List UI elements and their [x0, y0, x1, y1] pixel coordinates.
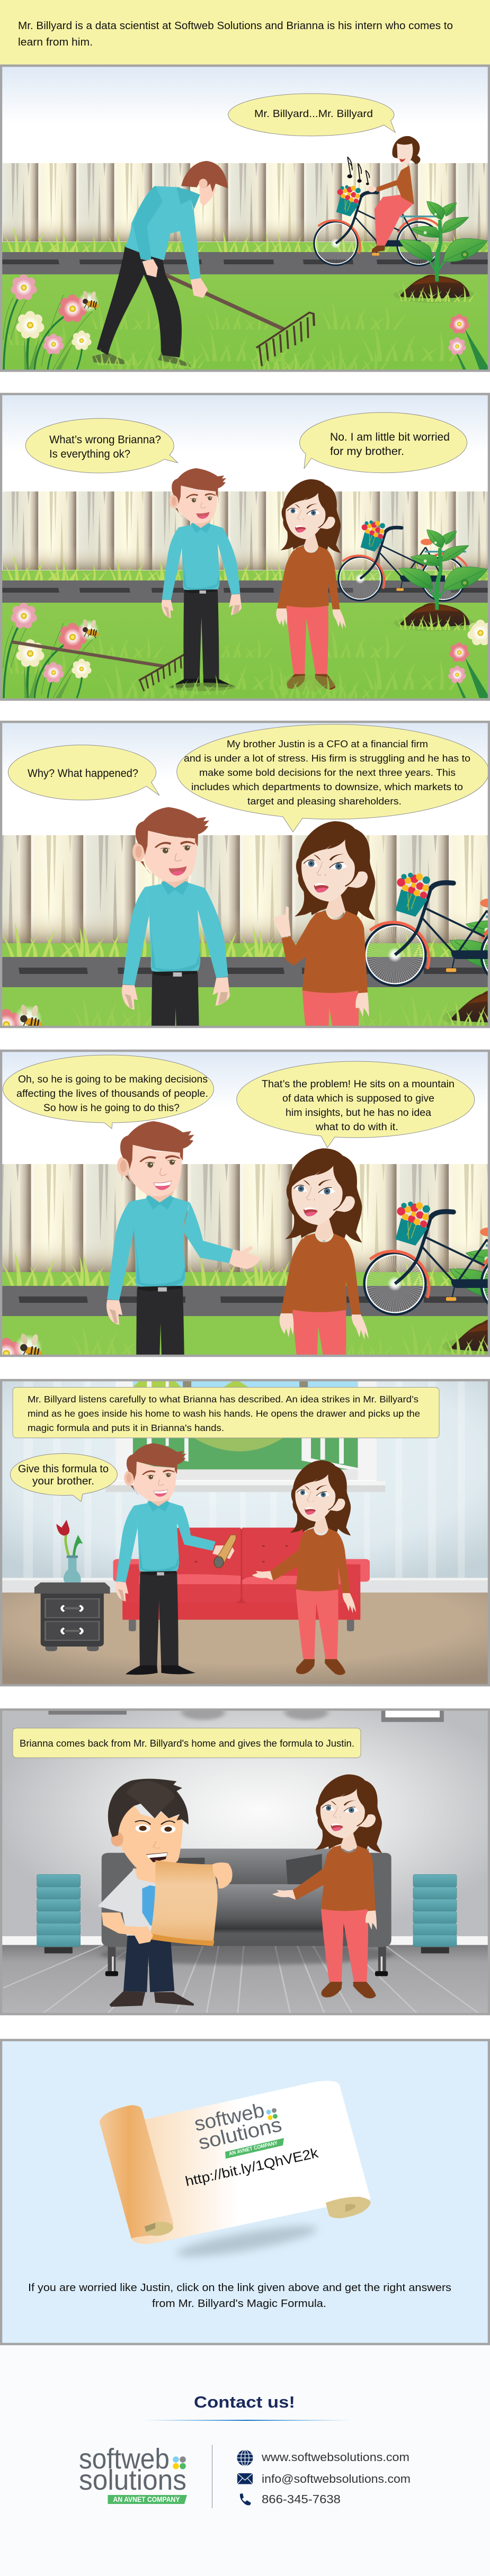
email: info@softwebsolutions.com — [262, 2472, 411, 2485]
rake — [165, 273, 315, 366]
narration caption: Brianna comes back from Mr. Billyard's home and gives the formula to Justin. — [20, 1738, 354, 1749]
music notes — [347, 157, 369, 185]
scroll illustration — [100, 2081, 371, 2244]
Mr. Billyard bending — [92, 161, 228, 367]
panel 4: How will he decide: That’s the problem! He sits on a mountain — [262, 1079, 455, 1090]
room background — [0, 1705, 490, 2015]
panel 3: What happened: My brother Justin is a CFO at a financial firm — [227, 739, 428, 749]
cream flower — [467, 620, 488, 645]
call to action text: from Mr. Billyard's Magic Formula. — [152, 2298, 326, 2310]
footer contact section — [0, 2345, 490, 2576]
panel frame — [1, 1051, 489, 1356]
panel frame — [1, 722, 489, 1027]
Justin with scroll — [98, 1779, 233, 2007]
speech bubble: Mr. Billyard — [10, 1454, 117, 1501]
speech bubble: Brianna — [300, 413, 467, 473]
panel 4: How will he decide: of data which is supposed to give — [282, 1093, 434, 1104]
panel 4: How will he decide: what to do with it. — [315, 1122, 398, 1133]
panel 5: living room, handing over the formula — [0, 1379, 490, 1687]
plant — [394, 530, 487, 631]
icon: globe — [237, 2450, 253, 2466]
Brianna — [276, 479, 346, 690]
bicycle and plant — [364, 873, 490, 1028]
panel 3: What happened: and is under a lot of stress. His firm is struggling and he has to — [184, 753, 470, 764]
panel 5: living room, handing over the formula: your brother. — [32, 1475, 94, 1487]
call to action text: If you are worried like Justin, click on the link given above and get the right answers — [28, 2282, 451, 2294]
panel 7: magic formula link — [1, 2040, 489, 2344]
panel frame — [1, 1710, 489, 2014]
panel 4: How will he decide — [0, 1050, 490, 1357]
link URL: http://bit.ly/1QhVE2k — [184, 2144, 320, 2189]
icon: phone — [240, 2493, 251, 2505]
Mr. Billyard gesturing — [106, 1121, 261, 1355]
Brianna on bicycle — [368, 136, 420, 253]
Softweb Solutions logo: solutions — [79, 2464, 186, 2496]
panel frame — [1, 66, 489, 371]
grass over feet — [92, 348, 308, 370]
bicycle — [338, 521, 467, 601]
room background — [0, 1379, 490, 1687]
narration caption — [13, 1728, 361, 1758]
panel 2: What's wrong: Is everything ok? — [49, 448, 130, 460]
close-up garden background — [0, 721, 490, 1042]
logo on scroll — [192, 2099, 284, 2159]
narration caption: magic formula and puts it in Brianna's hands. — [28, 1423, 224, 1433]
garden background — [0, 393, 490, 701]
intro caption: Mr. Billyard is a data scientist at Softweb Solutions and Brianna is his intern who comes to — [18, 20, 453, 32]
side table with vase — [34, 1520, 110, 1651]
website: www.softwebsolutions.com — [261, 2450, 409, 2464]
panel 2: What's wrong — [0, 393, 490, 701]
speech bubble: Mr. Billyard — [8, 745, 159, 800]
panel 3: What happened: Why? What happened? — [28, 767, 138, 780]
garden background — [0, 65, 490, 373]
speech bubble: Brianna — [237, 1061, 475, 1148]
panel 3: What happened: make some bold decisions for the next three years. This — [199, 767, 456, 778]
close-up garden background — [0, 1050, 490, 1371]
call to action text — [28, 2282, 451, 2310]
phone number: 866-345-7638 — [262, 2492, 341, 2506]
narration caption — [13, 1388, 439, 1438]
panel 4: How will he decide: him insights, but he has no idea — [286, 1107, 431, 1119]
speech bubble: Mr. Billyard — [3, 1055, 213, 1129]
narration caption: Mr. Billyard listens carefully to what Brianna has described. An idea strikes in Mr. Billyard’s — [28, 1394, 418, 1405]
Brianna — [280, 1148, 369, 1417]
panel 3: What happened — [0, 720, 490, 1028]
panel frame — [1, 394, 489, 700]
logo on scroll: solutions — [197, 2114, 284, 2154]
panel 3: What happened: target and pleasing shareholders. — [247, 796, 402, 807]
bicycle and plant — [364, 1202, 490, 1357]
panel 1: garden, Mr. Billyard raking — [0, 65, 490, 373]
icon: envelope — [237, 2473, 253, 2484]
red sofa — [113, 1527, 370, 1631]
Brianna — [252, 1460, 356, 1675]
grass over feet — [162, 672, 343, 695]
Softweb Solutions logo — [79, 2443, 187, 2504]
panel 2: What's wrong: for my brother. — [330, 445, 404, 458]
teal stacks and grey sofa — [37, 1849, 457, 1976]
panel 4: How will he decide: So how is he going to do this? — [43, 1103, 180, 1114]
rake on ground — [12, 642, 186, 691]
narration caption: mind as he goes inside his home to wash his hands. He opens the drawer and picks up the — [28, 1408, 420, 1419]
scroll shadow — [175, 2220, 319, 2262]
panel 3: What happened: includes which departments to downsize, which markets to — [191, 782, 463, 792]
contact heading: Contact us! — [194, 2393, 295, 2411]
Softweb Solutions logo: AN AVNET COMPANY — [113, 2496, 180, 2503]
Mr. Billyard — [122, 807, 230, 1026]
panel 4: How will he decide: Oh, so he is going to be making decisions — [18, 1074, 208, 1085]
panel 1: garden, Mr. Billyard raking: Mr. Billyard...Mr. Billyard — [254, 108, 373, 120]
panel 4: How will he decide: affecting the lives of thousands of people. — [16, 1088, 208, 1099]
Mr. Billyard with magic formula — [115, 1443, 236, 1675]
panel 2: What's wrong: What’s wrong Brianna? — [49, 434, 161, 446]
plant — [394, 201, 487, 303]
panel frame — [1, 1380, 489, 1685]
Brianna — [272, 1774, 382, 1998]
window — [105, 1379, 385, 1492]
logo on scroll: softweb — [192, 2099, 266, 2136]
bicycle — [314, 185, 443, 265]
speech bubble — [228, 94, 395, 136]
intro caption — [0, 0, 490, 65]
speech bubble: Brianna — [177, 724, 489, 832]
intro caption: learn from him. — [18, 37, 93, 48]
panel 5: living room, handing over the formula: Give this formula to — [18, 1463, 109, 1475]
panel 6: Justin's lounge — [0, 1705, 490, 2015]
panel 2: What's wrong: No. I am little bit worried — [330, 431, 450, 443]
Brianna with raised finger — [273, 821, 375, 1026]
Mr. Billyard — [162, 468, 242, 688]
logo on scroll: AN AVNET COMPANY — [228, 2140, 279, 2157]
Softweb Solutions logo: softweb — [79, 2443, 170, 2475]
speech bubble: Mr. Billyard — [25, 418, 178, 473]
